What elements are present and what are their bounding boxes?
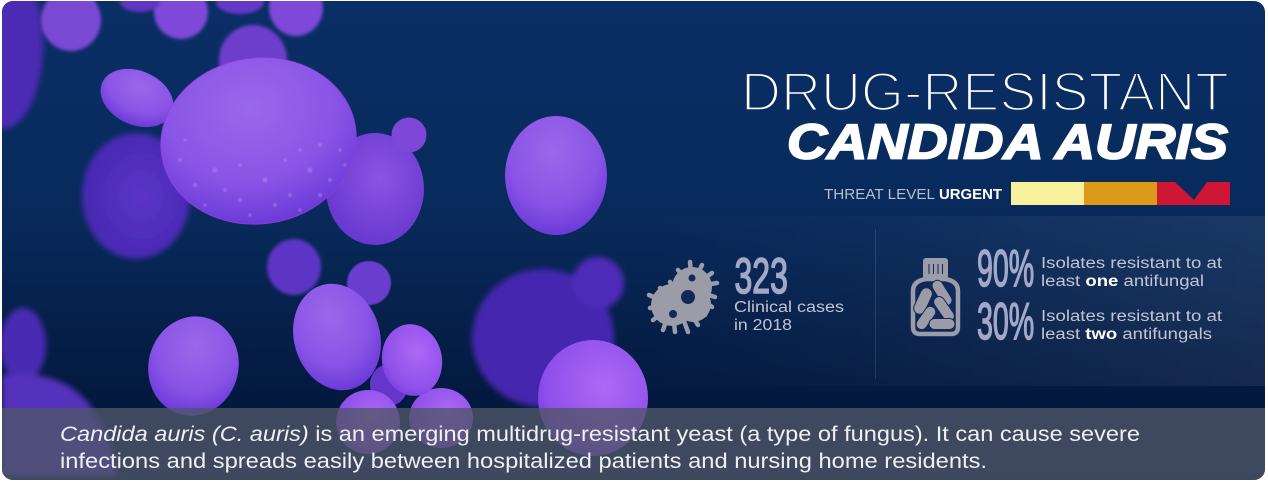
threat bar: [1011, 182, 1230, 205]
divider: [875, 229, 876, 379]
323 clinical cases: in 2018: [734, 317, 792, 334]
description bar: infections and spreads easily between hospitalized patients and nursing home residents.: [60, 450, 987, 473]
30% stat: 30%: [977, 292, 1034, 350]
icon: germ: [649, 262, 717, 332]
90% stat: Isolates resistant to at: [1041, 255, 1223, 272]
icon: pill bottle: [912, 258, 958, 334]
yeast cells illustration: [0, 0, 648, 476]
title: DRUG-RESISTANT: [741, 62, 1229, 122]
90% stat: 90%: [977, 239, 1034, 297]
323 clinical cases: [734, 257, 844, 330]
30% stat: least two antifungals: [1041, 326, 1212, 343]
90% stat: [978, 249, 1222, 290]
323 clinical cases: 323: [734, 248, 788, 304]
description bar: Candida auris (C. auris) is an emerging multidrug-resistant yeast (a type of fungus). It can cause severe: [60, 423, 1140, 446]
323 clinical cases: Clinical cases: [734, 299, 844, 316]
threat level: THREAT LEVEL: [824, 187, 935, 203]
threat level: [824, 182, 1230, 205]
main cell: [160, 57, 357, 225]
30% stat: [978, 302, 1222, 342]
description bar: [0, 408, 1268, 480]
stats panel: [972, 216, 1265, 386]
title: CANDIDA AURIS: [787, 116, 1228, 170]
90% stat: least one antifungal: [1041, 273, 1204, 290]
threat level: URGENT: [939, 187, 1002, 203]
title: [746, 73, 1229, 160]
30% stat: Isolates resistant to at: [1041, 308, 1223, 325]
